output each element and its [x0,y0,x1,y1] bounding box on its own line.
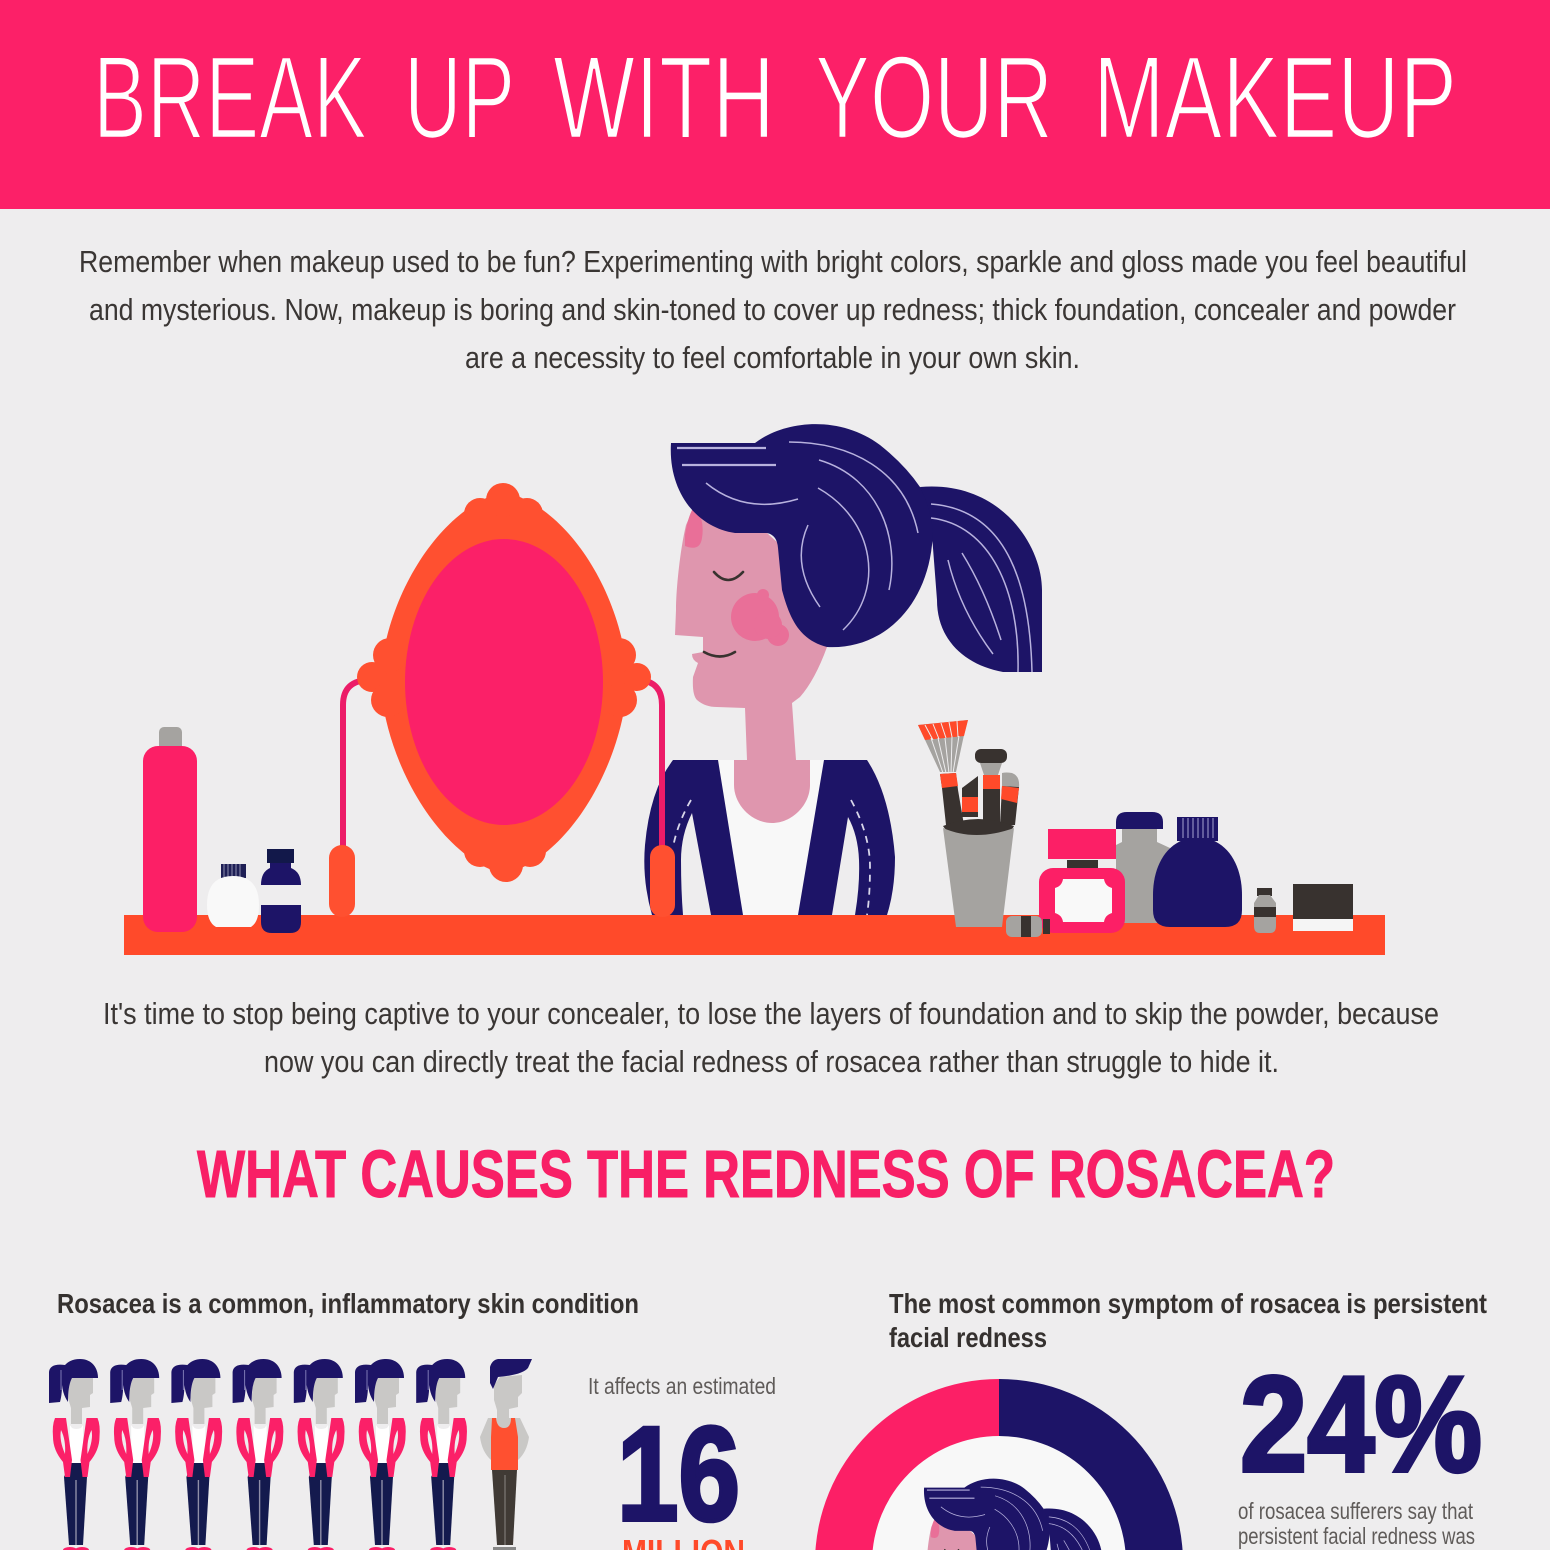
title: WITH [553,32,775,164]
navy bottle [261,849,301,933]
panel: symptom [815,1288,1487,1550]
statistic: 16 million [588,1373,776,1550]
navy jar [1153,817,1242,927]
woman figure [644,424,1042,915]
statistic: 24 percent: 24% [1240,1348,1482,1500]
panel: prevalence [49,1288,776,1550]
panel heading: facial redness [889,1322,1047,1353]
statistic: 16 million: 16 [617,1400,740,1549]
statistic: 24 percent [1238,1348,1482,1549]
intro paragraph: are a necessity to feel comfortable in your own skin. [465,340,1080,375]
donut chart [815,1379,1183,1550]
illustration: woman at vanity [124,424,1385,955]
makeup brushes and cup [918,720,1019,927]
title: UP [404,32,515,164]
second paragraph [103,996,1439,1079]
spray bottle [143,727,197,932]
title: YOUR [815,32,1053,164]
title: BREAK [93,32,367,164]
header banner [0,0,1550,209]
intro paragraph [79,244,1467,375]
statistic: 24 percent: persistent facial redness was [1238,1523,1475,1549]
statistic: 24 percent: of rosacea sufferers say that [1238,1498,1473,1524]
pink compact [1039,829,1125,933]
mirror [329,483,675,917]
shelf [124,915,1385,955]
head and hair [671,424,1042,760]
small tube [1006,916,1050,937]
grey bottle [1116,812,1170,923]
jacket and shirt [644,760,895,915]
title [93,32,1457,164]
panel heading: Rosacea is a common, inflammatory skin condition [57,1288,639,1319]
panel heading [889,1288,1487,1353]
people pictogram [49,1359,532,1550]
neck and chest [734,760,810,823]
second paragraph: now you can directly treat the facial redness of rosacea rather than struggle to hide it. [264,1044,1279,1079]
cosmetic box [1293,884,1353,931]
white jar [207,864,259,927]
statistic: 16 million: It affects an estimated [588,1373,776,1399]
icon: woman's head [924,1479,1102,1550]
small vial [1254,888,1276,933]
